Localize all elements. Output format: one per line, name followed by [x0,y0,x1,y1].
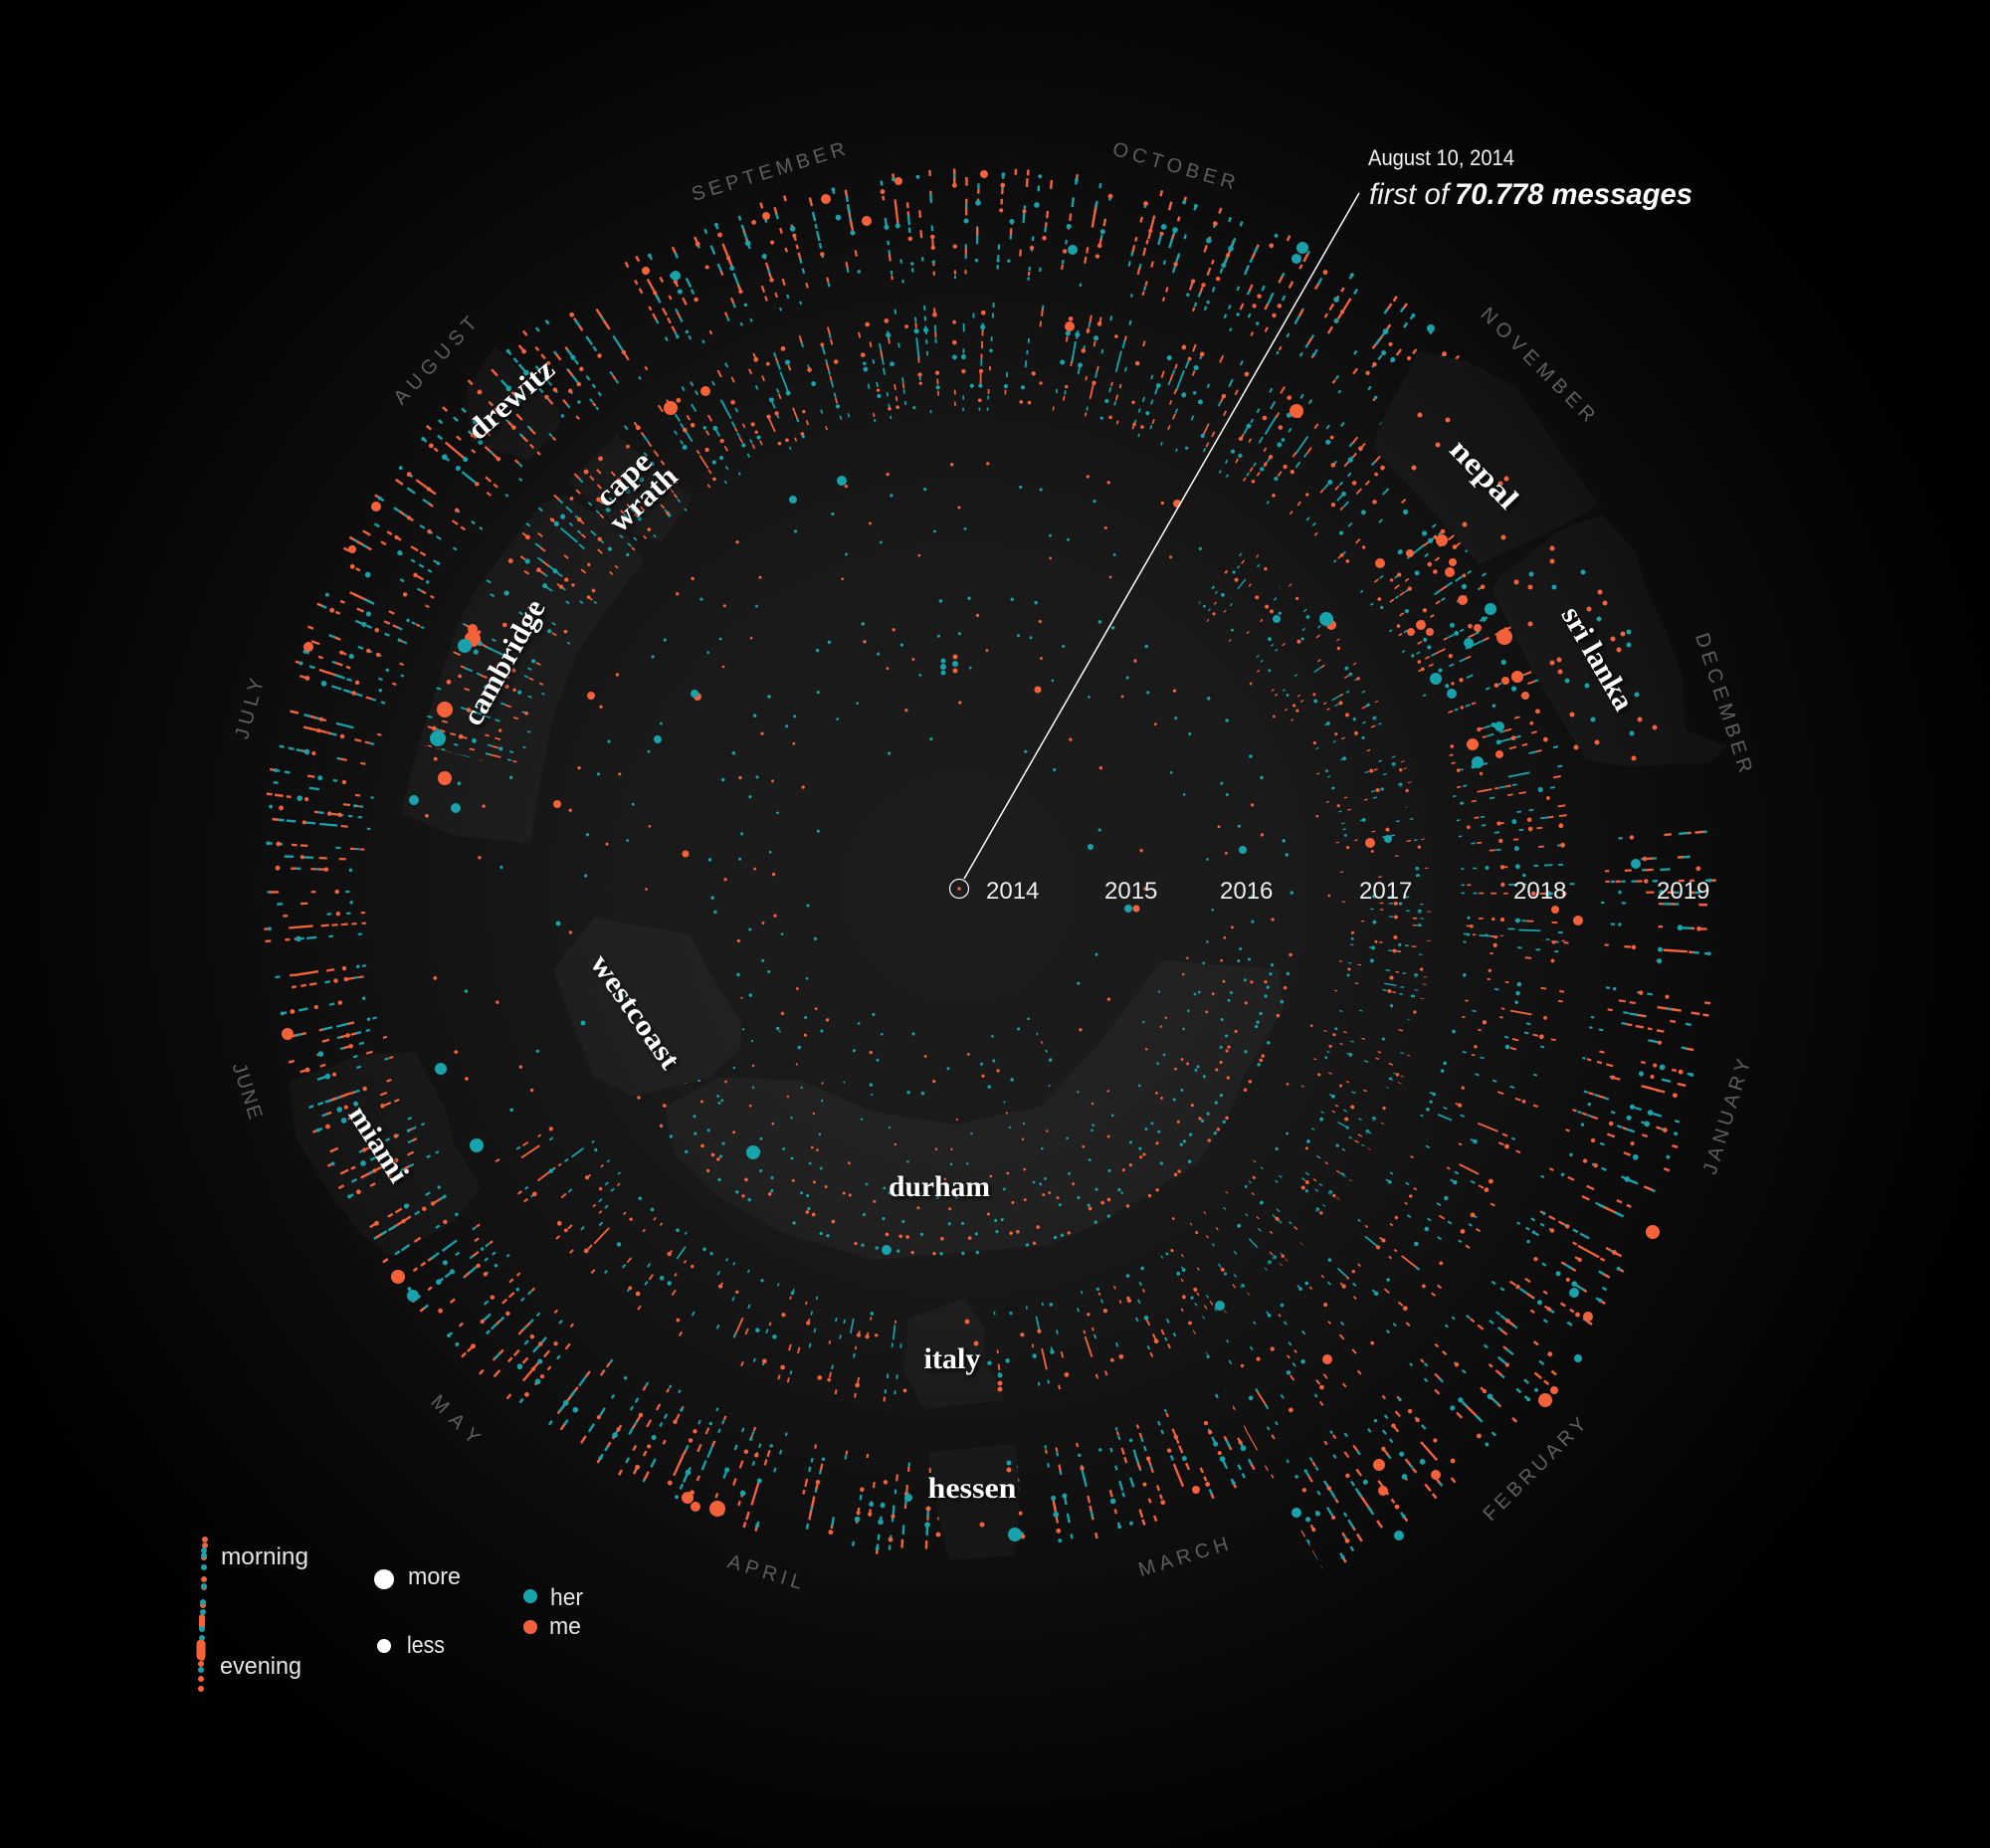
place labels: cambridge [456,594,552,731]
spiral turn: second year, medium winter and spring [496,933,1569,1439]
legend: time of day: morning [221,1543,308,1570]
month labels: NOVEMBER [1476,304,1599,427]
patch: nepal [1373,351,1598,564]
leader line [964,193,1359,879]
patch: italy [903,1299,1005,1409]
month labels: DECEMBER [1691,630,1756,775]
spiral turn: fourth year, sparse [708,596,1294,1172]
patch: sri lanka [1492,514,1728,766]
larger message blobs [288,174,1655,1536]
place labels: sri lanka [1554,601,1640,717]
spiral turn: third year, sparse [568,462,1423,1300]
legend: message volume: less [407,1632,445,1659]
month labels: MAY [426,1391,484,1449]
month labels: AUGUST [389,312,482,409]
spiral turn: earliest years, scattered [773,703,1145,1075]
place labels: italy [923,1342,981,1375]
place labels: drewitz [461,352,561,447]
spiral turn: second year, dense autumn [423,303,1575,941]
spiral turn: outer year, dense [264,169,1716,1569]
month labels [228,138,1756,1594]
legend: time of day [201,1540,308,1689]
place labels: miami [341,1100,415,1188]
legend: sender: her [550,1584,583,1611]
patch: cambridge [401,495,644,843]
place labels: durham [889,1170,990,1203]
year labels: 2014 [986,878,1039,905]
start marker [949,193,1359,898]
month labels: OCTOBER [1110,138,1238,194]
legend: sender [523,1584,583,1640]
origin circle [949,880,969,898]
year labels: 2019 [1657,878,1709,905]
place labels: hessen [927,1472,1017,1505]
place patches [289,345,1728,1560]
place labels: nepal [1443,433,1524,515]
place labels [341,352,1640,1505]
origin dot [957,887,961,891]
year labels: 2015 [1104,878,1157,905]
month labels: FEBRUARY [1479,1413,1591,1526]
year labels: 2017 [1359,878,1412,905]
patch: durham [665,960,1284,1260]
callout: first message: 70.778 messages [1455,178,1692,211]
legend: sender: me [549,1613,581,1640]
callout: first message: August 10, 2014 [1368,145,1514,170]
place labels: wrath [603,460,685,538]
place labels: westcoast [584,948,687,1076]
spiral turn: second year, sparse [425,320,1554,1393]
legend: message volume [374,1563,461,1659]
patch: drewitz [467,345,559,461]
month labels: JULY [231,676,269,741]
legend: time of day: evening [220,1653,301,1680]
legend [201,1540,583,1689]
spiral turn: third year, right side [1126,552,1431,1320]
month labels: JUNE [228,1060,266,1122]
month labels: APRIL [725,1550,805,1594]
patch: hessen [928,1444,1020,1560]
spiral turn: fourth year, durham right [1036,929,1293,1198]
month labels: JANUARY [1699,1057,1755,1177]
callout: first message: first of [1369,178,1452,211]
year labels: 2018 [1513,878,1566,905]
callout: first message [1368,145,1692,211]
year labels [986,878,1709,905]
year labels: 2016 [1220,878,1273,905]
patch: miami [289,1052,481,1257]
chart: message spiral [264,169,1716,1569]
month labels: MARCH [1136,1534,1231,1581]
patch: cape wrath [568,435,693,542]
patch: westcoast [553,918,741,1097]
month labels: SEPTEMBER [690,138,848,206]
place labels: cape [589,445,658,513]
legend: message volume: more [408,1563,461,1590]
spiral turn: third year, durham left [637,997,1184,1312]
